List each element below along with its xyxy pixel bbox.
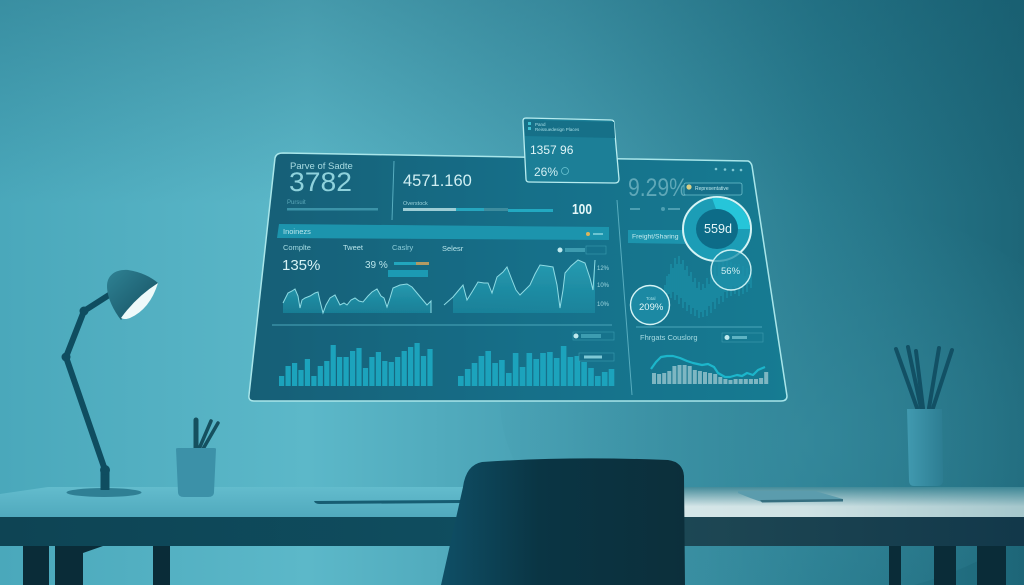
KPI: 9.29%: 9.29%	[628, 174, 688, 202]
lamp shade	[107, 270, 158, 320]
combo bars	[652, 365, 768, 384]
card value one: 1357 96	[530, 143, 574, 157]
panel dividers	[272, 161, 762, 395]
vase	[907, 409, 943, 486]
area chart axis values: 12%	[597, 266, 610, 272]
right panel header	[628, 230, 692, 244]
header label: Freight/Sharing	[632, 234, 679, 240]
KPI progress bar	[403, 208, 553, 212]
lamp arm	[62, 295, 110, 490]
lower right chart title: Fhrgats Couslorg	[640, 333, 698, 342]
card status ring	[562, 168, 568, 174]
pen cup left	[176, 420, 218, 497]
desk lamp	[62, 270, 158, 497]
mini progress	[394, 262, 429, 265]
bar chart left	[279, 343, 433, 386]
value: 209%	[639, 302, 664, 313]
desk front	[0, 517, 1024, 546]
floating card	[523, 118, 619, 183]
caption: Total	[646, 296, 656, 301]
area chart middle	[444, 260, 595, 313]
donut value: 559d	[704, 221, 732, 236]
legend chips: middle bar chart	[573, 332, 614, 361]
label: Complte	[283, 243, 311, 252]
KPI sub label: Pursuit	[287, 200, 306, 206]
KPI value: 4571.160	[403, 172, 472, 190]
value: 39 %	[365, 260, 388, 271]
legend chip: donut: Representative	[695, 186, 729, 192]
value: 135%	[282, 257, 320, 274]
lamp light	[121, 283, 158, 319]
header status dot	[586, 232, 590, 236]
label: Tweet	[343, 243, 364, 252]
tablet	[738, 491, 843, 502]
KPI: 100: 100	[572, 201, 592, 218]
KPI value: 3782	[289, 167, 352, 197]
small circle: 209%	[630, 286, 670, 324]
value: 56%	[721, 266, 741, 277]
desk top	[0, 487, 1024, 517]
KPI label: Parve of Sadte	[290, 161, 353, 172]
sticks	[896, 347, 952, 408]
area chart axis values: 10%	[597, 302, 610, 308]
lamp base	[66, 488, 142, 497]
combo line	[651, 356, 765, 377]
card surface	[523, 118, 619, 183]
combo chart lower right	[651, 356, 768, 384]
chair back	[441, 458, 685, 585]
donut chart	[683, 197, 751, 261]
panel surface	[249, 153, 787, 401]
header label: Inoinezs	[283, 227, 311, 236]
laptop	[314, 500, 460, 504]
pens	[196, 420, 218, 449]
desk	[0, 487, 1024, 585]
metric column: tweet	[343, 243, 388, 271]
KPI sub label: Overstock	[403, 201, 428, 207]
area chart left	[283, 284, 431, 313]
area chart axis values	[597, 266, 610, 308]
metric column: complte	[282, 243, 320, 274]
card heading: Reissuedesign Places	[535, 127, 580, 132]
window dots	[715, 168, 742, 171]
section header bar: inoinezs	[277, 224, 609, 240]
tag chip	[388, 270, 428, 277]
small circle: 56%	[711, 250, 751, 290]
KPI: parve of sadte	[287, 161, 378, 210]
KPI: 4571.160	[403, 172, 553, 212]
card heading: Pand	[535, 122, 546, 127]
legend chip: donut	[684, 183, 742, 195]
bar chart middle	[458, 346, 614, 386]
wave chart	[665, 256, 751, 318]
card top strip	[524, 120, 615, 138]
card value two: 26%	[534, 165, 558, 179]
cup	[176, 448, 216, 497]
desk legs	[23, 546, 1006, 585]
metric column: caslry	[388, 243, 429, 277]
metric column: selesr: Selesr	[442, 244, 464, 253]
donut ring	[683, 197, 751, 261]
area chart axis values: 10%	[597, 283, 610, 289]
legend chip: area chart	[558, 246, 606, 254]
KPI progress track	[287, 208, 378, 210]
main dashboard panel	[249, 153, 787, 401]
donut hole	[696, 209, 738, 249]
donut highlight segment	[712, 198, 750, 229]
KPI sub labels	[630, 207, 680, 211]
card heading	[528, 122, 580, 132]
vase with sticks	[896, 347, 952, 486]
legend chip: lower right	[722, 333, 763, 342]
label: Caslry	[392, 243, 414, 252]
header status text	[593, 233, 603, 235]
